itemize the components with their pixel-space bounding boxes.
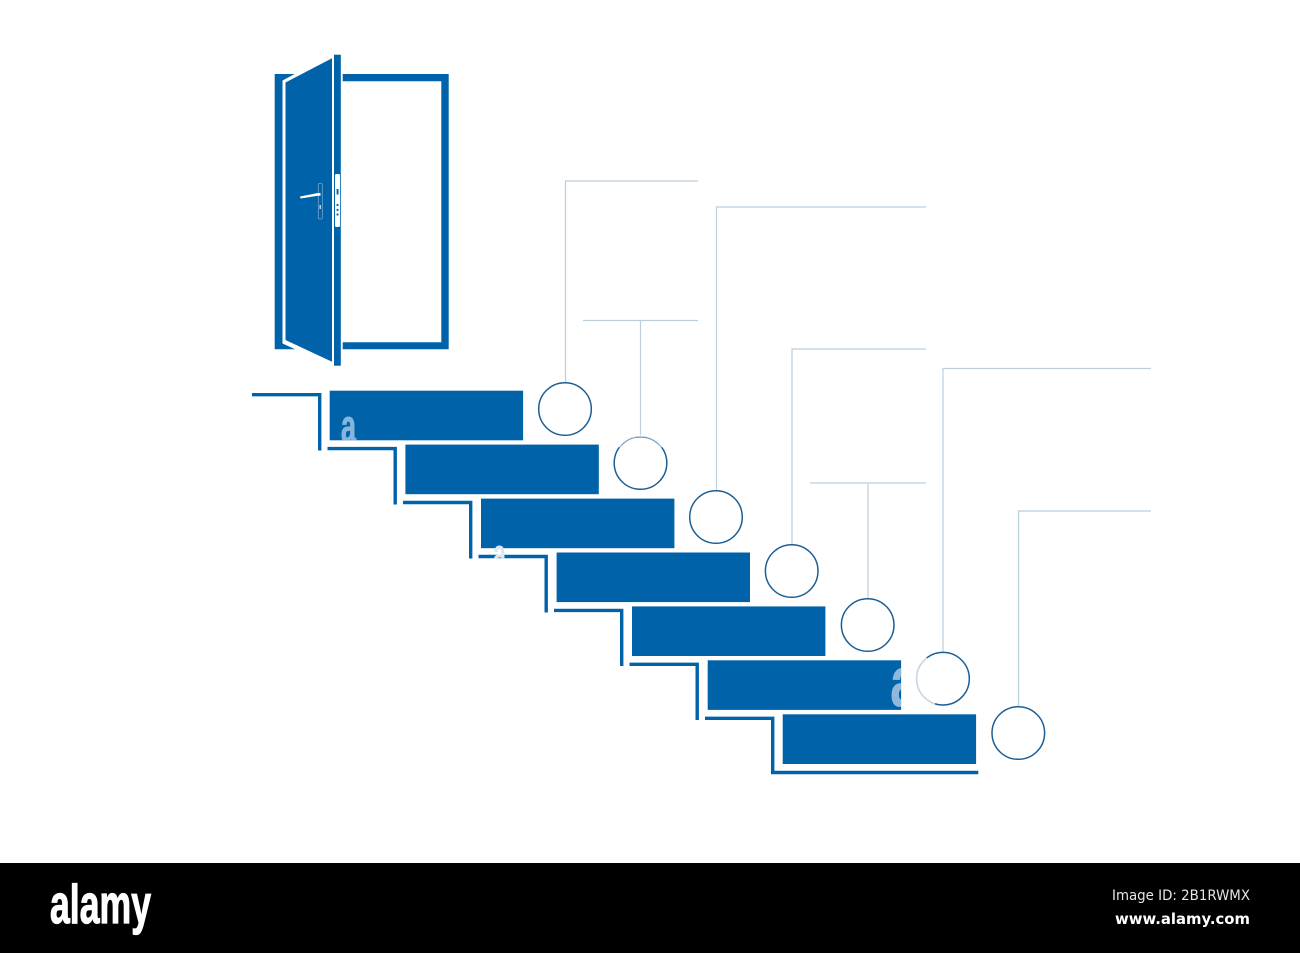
step 6 — [708, 660, 901, 710]
circle 4 — [765, 545, 818, 597]
stair outline — [252, 395, 978, 772]
callout leader lines — [566, 181, 1151, 706]
step 4 — [557, 552, 750, 602]
website address: www.alamy.com — [1115, 910, 1250, 928]
step 7 — [783, 714, 976, 764]
leader 5 — [810, 483, 926, 599]
step 2 — [405, 445, 599, 494]
watermark letter on step 6: a — [890, 643, 917, 721]
leader 6 — [943, 368, 1151, 652]
watermark letter on step 1: a — [341, 400, 356, 452]
leader 2 — [583, 320, 698, 436]
number circles — [539, 383, 1045, 759]
circle 1 — [539, 383, 591, 435]
leader 4 — [792, 349, 926, 545]
footer bar — [0, 863, 1300, 953]
door jamb — [334, 55, 341, 366]
circle 5 — [841, 599, 894, 651]
watermark letter between steps 3 and 4: a — [493, 532, 506, 576]
step 5 — [632, 606, 825, 656]
leader 3 — [716, 207, 926, 491]
circle 6 — [917, 652, 969, 705]
door leaf — [286, 58, 332, 362]
circle 7 — [992, 707, 1045, 759]
leader 1 — [566, 181, 698, 383]
icon: open door — [275, 53, 449, 367]
circle 3 — [690, 491, 742, 543]
step blocks — [330, 391, 976, 764]
leader 7 — [1018, 511, 1151, 706]
door frame — [275, 74, 449, 349]
footer logo: alamy — [50, 873, 151, 935]
door handle — [300, 184, 322, 219]
image id: Image ID: 2B1RWMX — [1112, 888, 1250, 904]
circle 2 — [614, 437, 667, 489]
door leaf outline — [282, 53, 334, 367]
step 3 — [481, 499, 674, 548]
watermark fade over circles 2 and 6 — [619, 436, 935, 704]
step 1 — [330, 391, 523, 440]
lock plate — [335, 174, 340, 227]
